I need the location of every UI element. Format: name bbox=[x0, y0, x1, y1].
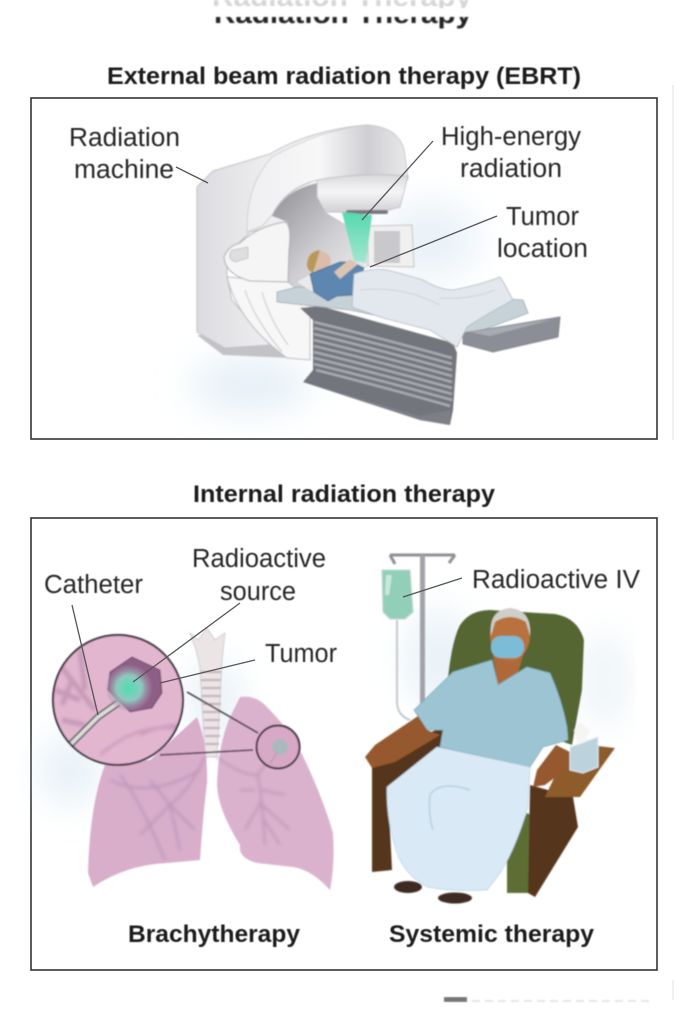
connector lines bbox=[160, 692, 258, 755]
tumor bbox=[108, 657, 162, 712]
pedestal bbox=[300, 306, 457, 425]
label: high-energy radiation: High-energy bbox=[441, 123, 581, 151]
label: high-energy radiation: radiation bbox=[460, 155, 562, 183]
label: tumor: Tumor bbox=[265, 640, 337, 668]
round front cover bbox=[224, 222, 290, 282]
right lung bbox=[217, 697, 334, 890]
label: tumor location bbox=[497, 203, 588, 263]
IV tube bbox=[397, 620, 410, 720]
heading: external beam radiation therapy: External beam radiation therapy (EBRT) bbox=[107, 63, 581, 90]
table bbox=[277, 287, 528, 335]
illustration: lungs with brachytherapy bbox=[40, 628, 334, 890]
patient head and gown bbox=[296, 274, 322, 292]
label: catheter: Catheter bbox=[44, 571, 144, 599]
trachea bbox=[190, 628, 225, 757]
label: radiation machine: Radiation bbox=[69, 124, 180, 152]
label: radioactive source bbox=[192, 545, 326, 606]
leader: catheter bbox=[72, 605, 98, 715]
airways bbox=[110, 757, 290, 860]
tissue box bbox=[570, 722, 598, 773]
label: radioactive IV: Radioactive IV bbox=[472, 566, 640, 594]
soft glow bbox=[405, 610, 630, 730]
leader: tumor bbox=[160, 660, 255, 683]
chair right side bbox=[528, 785, 578, 897]
treatment head bbox=[317, 175, 408, 213]
feet bbox=[394, 881, 472, 904]
blanket bbox=[352, 270, 513, 347]
table extension bbox=[463, 317, 560, 352]
label: radiation machine bbox=[69, 124, 180, 184]
illustration: systemic therapy patient bbox=[365, 555, 630, 904]
panel: internal radiation therapy bbox=[31, 518, 657, 970]
label: tumor location: Tumor bbox=[506, 203, 580, 231]
left arm and armrest bbox=[365, 716, 440, 768]
small inset circle bbox=[256, 726, 300, 768]
shirt bbox=[414, 660, 568, 767]
label: radiation machine: machine bbox=[74, 156, 174, 184]
leader: tumor location bbox=[370, 216, 497, 267]
sublabel: systemic therapy: Systemic therapy bbox=[389, 921, 594, 948]
leader: radiation machine bbox=[176, 167, 208, 183]
leader: radioactive IV bbox=[403, 578, 462, 597]
label: high-energy radiation bbox=[441, 123, 581, 183]
label: radioactive source: Radioactive bbox=[192, 545, 326, 573]
illustration: linear accelerator with patient bbox=[190, 125, 560, 425]
magnifier bbox=[53, 635, 185, 765]
catheter bbox=[70, 703, 118, 745]
footer smudge bbox=[444, 997, 652, 1002]
right hand and armrest bbox=[533, 745, 570, 787]
chair seat green bbox=[507, 813, 540, 893]
IV pole bbox=[390, 555, 455, 705]
pillar and gantry bbox=[197, 125, 408, 348]
mask bbox=[491, 636, 524, 658]
panel: EBRT bbox=[31, 98, 657, 439]
blanket bbox=[387, 747, 530, 891]
chair back bbox=[448, 610, 584, 745]
side table bbox=[545, 746, 615, 797]
leader: high-energy radiation bbox=[362, 141, 433, 220]
patient neck and head bbox=[493, 652, 524, 686]
label: radioactive source: source bbox=[220, 578, 296, 606]
soft glow bbox=[40, 660, 240, 805]
bore bbox=[272, 183, 368, 292]
leader: radioactive source bbox=[133, 603, 240, 682]
IV bag bbox=[382, 570, 413, 619]
soft glow bbox=[190, 200, 480, 411]
lower housing bbox=[227, 277, 310, 360]
heading: internal radiation therapy: Internal radiation therapy bbox=[193, 481, 495, 508]
label: tumor location: location bbox=[497, 235, 588, 263]
sublabel: brachytherapy: Brachytherapy bbox=[128, 921, 300, 948]
right edge marks bbox=[672, 85, 674, 1000]
left lung bbox=[88, 717, 207, 887]
base shadow bbox=[197, 335, 290, 358]
radiation beam bbox=[342, 212, 372, 263]
imager panel bbox=[368, 225, 414, 267]
chair left arm bbox=[372, 725, 445, 872]
